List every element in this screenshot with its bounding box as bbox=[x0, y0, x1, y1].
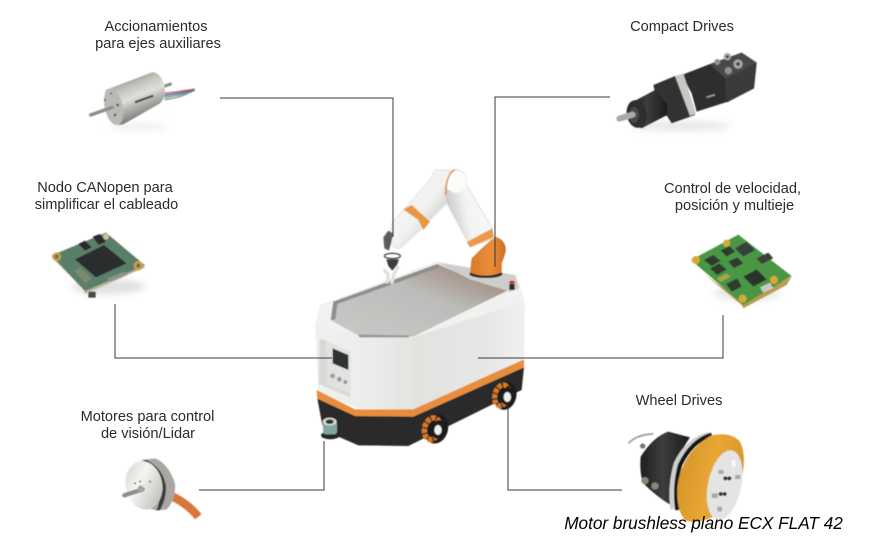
forearm bbox=[390, 170, 450, 249]
connector: compact drives to robot base joint bbox=[495, 97, 610, 267]
robot orange stripe bbox=[317, 359, 524, 417]
gripper bbox=[383, 231, 393, 251]
label: vision and lidar motors: Motores para control bbox=[81, 409, 214, 425]
label: auxiliary axis drives: para ejes auxiliares bbox=[95, 36, 221, 52]
icon: wheel drive with orange tire bbox=[628, 432, 748, 523]
emergency stop button bbox=[509, 281, 515, 290]
upper arm bbox=[445, 169, 493, 244]
connector: motion control to robot body bbox=[478, 315, 723, 358]
control panel with screen and buttons bbox=[319, 338, 351, 397]
connector: vision motors to lidar bbox=[199, 441, 324, 490]
robot body: white housing bbox=[315, 262, 525, 410]
icon: flat brushless motor bbox=[122, 458, 198, 517]
label: wheel drives: Wheel Drives bbox=[636, 393, 722, 409]
robot top tray bbox=[331, 263, 519, 337]
label: compact drives: Compact Drives bbox=[630, 19, 734, 35]
label: speed, position and multi-axis control: Control de velocidad, bbox=[664, 181, 801, 197]
robot black base bbox=[317, 367, 524, 446]
robot illustration bbox=[315, 169, 525, 446]
connector: auxiliary axis drives to robot arm bbox=[220, 98, 393, 237]
label: auxiliary axis drives: Accionamientos bbox=[104, 19, 208, 35]
mecanum wheel rear bbox=[491, 379, 520, 412]
connector: CANopen node to control panel bbox=[115, 304, 332, 358]
label: CANopen node: simplificar el cableado bbox=[35, 197, 178, 213]
icon: CANopen node board bbox=[52, 233, 145, 298]
caption: brushless flat motor: Motor brushless plano ECX FLAT 42 bbox=[564, 513, 843, 533]
label: speed, position and multi-axis control: posición y multieje bbox=[675, 198, 794, 214]
icon: green motion controller board bbox=[691, 235, 792, 308]
label: vision and lidar motors: de visión/Lidar bbox=[101, 426, 195, 442]
icon: maxon brushed motor bbox=[91, 72, 195, 130]
lidar sensor bbox=[321, 418, 340, 439]
label: CANopen node: Nodo CANopen para bbox=[37, 180, 174, 196]
robot arm bbox=[383, 169, 506, 284]
arm base bbox=[469, 270, 503, 278]
mecanum wheel front bbox=[421, 411, 451, 446]
icon: compact drive gearmotor bbox=[619, 53, 757, 131]
connector: wheel drives to wheel bbox=[508, 408, 622, 490]
